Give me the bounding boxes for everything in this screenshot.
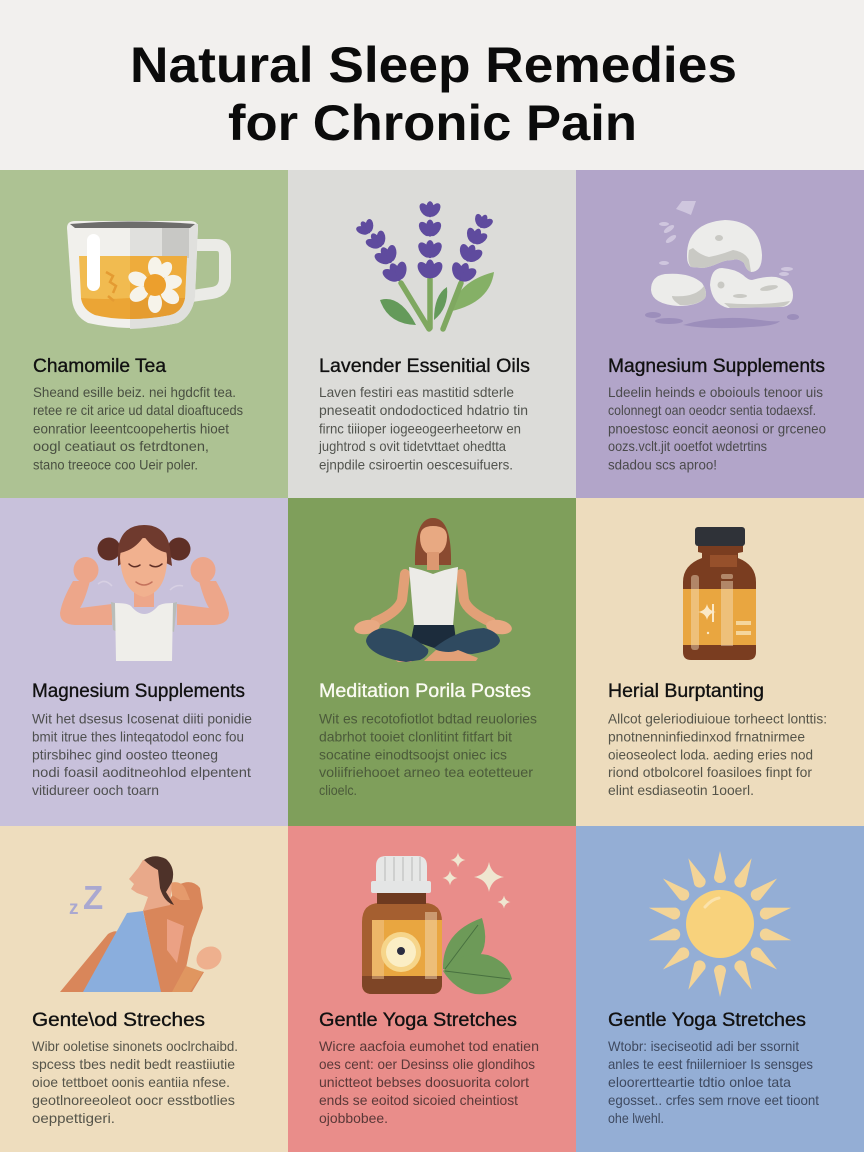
heading: Gente\od Streches: [32, 1009, 205, 1031]
panel: gentle yoga stretches, essential oil: [288, 826, 576, 1152]
icon: sleeping person stretching: [60, 856, 226, 992]
heading: Magnesium Supplements: [32, 680, 245, 702]
text block: elint esdiaseotin 1ooerl.: [608, 782, 754, 798]
text block: ends se eoitod sicoied cheintiost: [319, 1092, 518, 1108]
text block: [319, 1038, 539, 1126]
panel: magnesium supplements, stretching person: [0, 498, 288, 826]
text block: Wit es recotofiotlot bdtad reuolories: [319, 710, 537, 726]
text block: Wibr ooletise sinonets ooclrchaibd.: [32, 1038, 238, 1054]
text block: Allcot geleriodiuioue torheect lonttis:: [608, 710, 827, 726]
text block: stano treeoce coo Ueir poler.: [33, 456, 198, 472]
text block: ohe lwehl.: [608, 1110, 664, 1126]
title band: [0, 0, 864, 170]
text block: [32, 1038, 238, 1126]
text block: nodi foasil aoditneohlod elpentent: [32, 764, 251, 780]
text block: oieoseolect loda. aeding eries nod: [608, 746, 813, 762]
text block: Wicre aacfoia eumohet tod enatien: [319, 1038, 539, 1054]
text block: eloorertteartie tdtio onloe tata: [608, 1074, 791, 1090]
heading: Lavender Essenitial Oils: [319, 355, 530, 377]
flower on cup: [126, 257, 183, 313]
text block: Wit het dsesus Icosenat diiti ponidie: [32, 710, 252, 726]
sleep letters: Z: [83, 879, 103, 916]
text block: Sheand esille beiz. nei hgdcfit tea.: [33, 384, 236, 400]
text block: socatine einodtsoojst oniec ics: [319, 746, 507, 762]
text block: [608, 384, 826, 472]
heading: Meditation Porila Postes: [319, 680, 531, 702]
icon: amber bottle: [683, 527, 756, 660]
text block: [319, 710, 537, 798]
icon: sun: [648, 851, 792, 997]
text block: [608, 710, 827, 798]
icon: tea cup: [67, 221, 225, 329]
text block: [32, 710, 252, 798]
text block: Ldeelin heinds e oboiouls tenoor uis: [608, 384, 823, 400]
title: [130, 37, 737, 151]
text block: Laven festiri eas mastitid sdterle: [319, 384, 514, 400]
text block: bmit itrue thes linteqatodol eonc fou: [32, 728, 244, 744]
text block: eonratior leeentcoopehertis hioet: [33, 420, 229, 436]
text block: voliifriehooet arneo tea eotetteuer: [319, 764, 533, 780]
text block: [608, 1038, 819, 1126]
sleep letters: z: [69, 898, 78, 919]
heading: Herial Burptanting: [608, 680, 764, 702]
heading: Gentle Yoga Stretches: [608, 1009, 806, 1031]
text block: riond otbolcorel foasiloes finpt for: [608, 764, 812, 780]
text block: colonnegt oan oeodcr sentia todaexsf.: [608, 402, 816, 418]
panel: gentle stretches: [0, 826, 288, 1152]
text block: [33, 384, 243, 472]
text block: pnotnenninfiedinxod frnatnirmee: [608, 728, 805, 744]
text block: clioelc.: [319, 782, 357, 798]
icon: oil bottle with leaves: [362, 852, 512, 994]
text block: anles te eest fniilernioer Is sensges: [608, 1056, 813, 1072]
sleep letters: [69, 879, 103, 919]
text block: unictteot bebses doosuorita colort: [319, 1074, 529, 1090]
text block: oogl ceatiaut os fetrdtonen,: [33, 438, 209, 454]
text block: jughtrod s ovit tidetvttaet ohedtta: [318, 438, 506, 454]
text block: ojobbobee.: [319, 1110, 388, 1126]
text block: ptirsbihec gind oosteo tteoneg: [32, 746, 218, 762]
text block: oozs.vclt.jit ooetfot wdetrtins: [608, 438, 767, 454]
panel: lavender essential oils: [288, 170, 576, 498]
icon: pills: [645, 201, 799, 328]
text block: egosset.. crfes sem rnove eet tioont: [608, 1092, 819, 1108]
panel: magnesium supplements: [576, 170, 864, 498]
text block: geotlnoreeoleot oocr esstbotlies: [32, 1092, 235, 1108]
panel: chamomile tea: [0, 170, 288, 498]
text block: dabrhot tooiet clonlitint fitfart bit: [319, 728, 512, 744]
text block: sdadou scs aproo!: [608, 456, 717, 472]
text block: [318, 384, 528, 472]
text block: spcess tbes nedit bedt reastiiutie: [32, 1056, 235, 1072]
text block: ejnpdile csiroertin oescesuifuers.: [319, 456, 513, 472]
heading: Gentle Yoga Stretches: [319, 1009, 517, 1031]
text block: retee re cit arice ud datal dioaftuceds: [33, 402, 243, 418]
text block: pnoestosc eoncit aeonosi or grceneo: [608, 420, 826, 436]
icon: lavender: [352, 201, 496, 329]
text block: oeppettigeri.: [32, 1110, 115, 1126]
panel: meditation: [288, 498, 576, 826]
text block: pneseatit ondodocticed hdatrio tin: [319, 402, 528, 418]
title: Natural Sleep Remedies: [130, 37, 737, 93]
text block: Wtobr: iseciseotid adi ber ssornit: [608, 1038, 799, 1054]
sparkles: [442, 852, 510, 908]
icon: meditating person: [353, 518, 513, 662]
title: for Chronic Pain: [228, 95, 637, 151]
heading: Magnesium Supplements: [608, 355, 825, 377]
panel: herbal bottle: [576, 498, 864, 826]
heading: Chamomile Tea: [33, 355, 166, 377]
text block: firnc tiiioper iogeeogeerheetorw en: [319, 420, 521, 436]
text block: oioe tettboet oonis eantiia nfese.: [32, 1074, 230, 1090]
text block: oes cent: oer Desinss olie glondihos: [319, 1056, 535, 1072]
flower spikes: [352, 201, 496, 289]
text block: vitidureer ooch toarn: [32, 782, 159, 798]
panel: gentle yoga stretches, sun: [576, 826, 864, 1152]
icon: person with raised arms: [60, 525, 229, 661]
